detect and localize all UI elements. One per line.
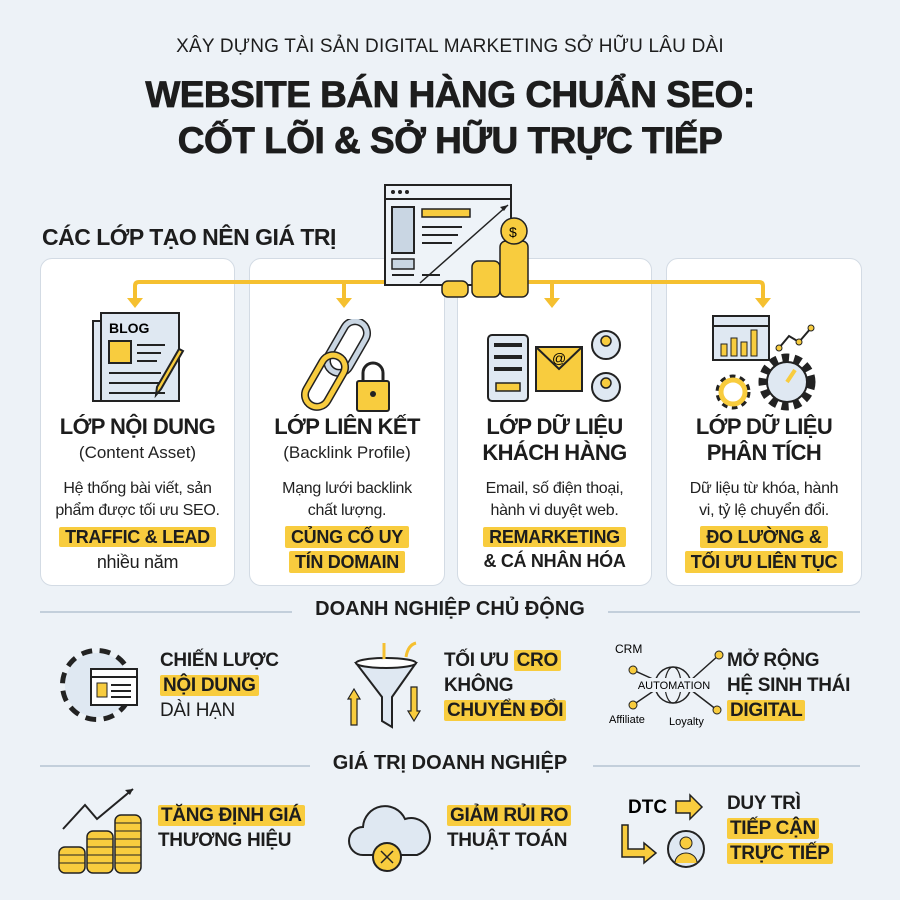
item: CRO: CHUYỂN ĐỔI — [447, 700, 563, 721]
item: ecosystem: MỞ RỘNG — [727, 650, 819, 671]
item: ecosystem — [609, 642, 850, 728]
card 2: Mạng lưới backlink — [282, 480, 412, 497]
icon: blog — [92, 312, 184, 402]
item: content strategy: DÀI HẠN — [160, 700, 235, 721]
card 4: PHÂN TÍCH — [707, 440, 821, 465]
card 2: LỚP LIÊN KẾT — [274, 414, 420, 439]
item: CRO: TỐI ƯU CRO — [444, 650, 558, 671]
item: DTC: DTC — [628, 797, 667, 818]
item: ecosystem: DIGITAL — [730, 700, 802, 721]
item: ecosystem: Affiliate — [609, 714, 645, 726]
card 2: (Backlink Profile) — [283, 443, 411, 462]
item: DTC — [621, 792, 833, 868]
item: brand value: THƯƠNG HIỆU — [158, 830, 291, 851]
item: content strategy — [60, 648, 279, 722]
card 1: nhiều năm — [97, 552, 178, 572]
card 2: chất lượng. — [308, 502, 386, 519]
item: ecosystem: Loyalty — [669, 716, 704, 728]
icon: website with coins: $ — [509, 224, 517, 240]
item: content strategy: CHIẾN LƯỢC — [160, 650, 279, 671]
item: CRO — [347, 642, 566, 729]
arrows: connector — [127, 280, 771, 308]
card 4: ĐO LƯỜNG & — [706, 527, 822, 547]
card 4: LỚP DỮ LIỆU — [696, 414, 832, 439]
card 3: & CÁ NHÂN HÓA — [483, 551, 626, 571]
card 1: (Content Asset) — [79, 443, 196, 462]
title: CỐT LÕI & SỞ HỮU TRỰC TIẾP — [178, 120, 722, 161]
icon: chain lock — [300, 319, 390, 412]
item: brand value — [58, 788, 305, 874]
card 1: TRAFFIC & LEAD — [65, 527, 210, 547]
item: algorithm risk: THUẬT TOÁN — [447, 830, 567, 851]
card 3 — [457, 258, 652, 586]
card 3: Email, số điện thoại, — [486, 480, 623, 497]
card 4 — [666, 258, 862, 586]
item: ecosystem: HỆ SINH THÁI — [727, 675, 850, 696]
item: DTC: TRỰC TIẾP — [730, 843, 830, 864]
item: DTC: DUY TRÌ — [727, 793, 801, 814]
title — [144, 73, 755, 161]
icon: blog: BLOG — [109, 320, 150, 336]
card 1 — [40, 258, 235, 586]
heading: value layers: CÁC LỚP TẠO NÊN GIÁ TRỊ — [42, 224, 336, 250]
card 3: hành vi duyệt web. — [490, 502, 619, 519]
icon: customer data — [487, 330, 621, 402]
card 4: vi, tỷ lệ chuyển đổi. — [699, 502, 829, 519]
title: WEBSITE BÁN HÀNG CHUẨN SEO: — [145, 74, 755, 115]
item: DTC: TIẾP CẬN — [730, 818, 816, 839]
icon: analytics — [712, 315, 816, 410]
item: algorithm risk — [348, 804, 571, 872]
item: algorithm risk: GIẢM RỦI RO — [450, 805, 568, 826]
card 3: KHÁCH HÀNG — [482, 440, 627, 465]
card 2 — [249, 258, 445, 586]
item: ecosystem: CRM — [615, 642, 642, 656]
title: LỚP NỘI DUNG — [60, 414, 215, 439]
card 4: Dữ liệu từ khóa, hành — [690, 480, 838, 497]
item: brand value: TĂNG ĐỊNH GIÁ — [161, 805, 302, 826]
item: content strategy: NỘI DUNG — [163, 675, 256, 696]
section: business value: GIÁ TRỊ DOANH NGHIỆP — [333, 752, 567, 774]
section: proactive: DOANH NGHIỆP CHỦ ĐỘNG — [315, 598, 585, 620]
subtitle: XÂY DỰNG TÀI SẢN DIGITAL MARKETING SỞ HỮU LÂU DÀI — [176, 36, 724, 57]
card 2: TÍN DOMAIN — [295, 552, 399, 572]
item: CRO: KHÔNG — [444, 675, 513, 696]
card 1: Hệ thống bài viết, sản — [63, 480, 212, 497]
item: ecosystem: AUTOMATION — [638, 680, 710, 692]
card 1: phẩm được tối ưu SEO. — [55, 502, 220, 519]
card 2: CỦNG CỐ UY — [291, 527, 403, 547]
icon: website with coins — [384, 184, 529, 298]
icon: customer data: @ — [552, 350, 566, 366]
card 3: LỚP DỮ LIỆU — [486, 414, 623, 439]
card 3: REMARKETING — [489, 527, 620, 547]
card 4: TỐI ƯU LIÊN TỤC — [691, 552, 837, 572]
